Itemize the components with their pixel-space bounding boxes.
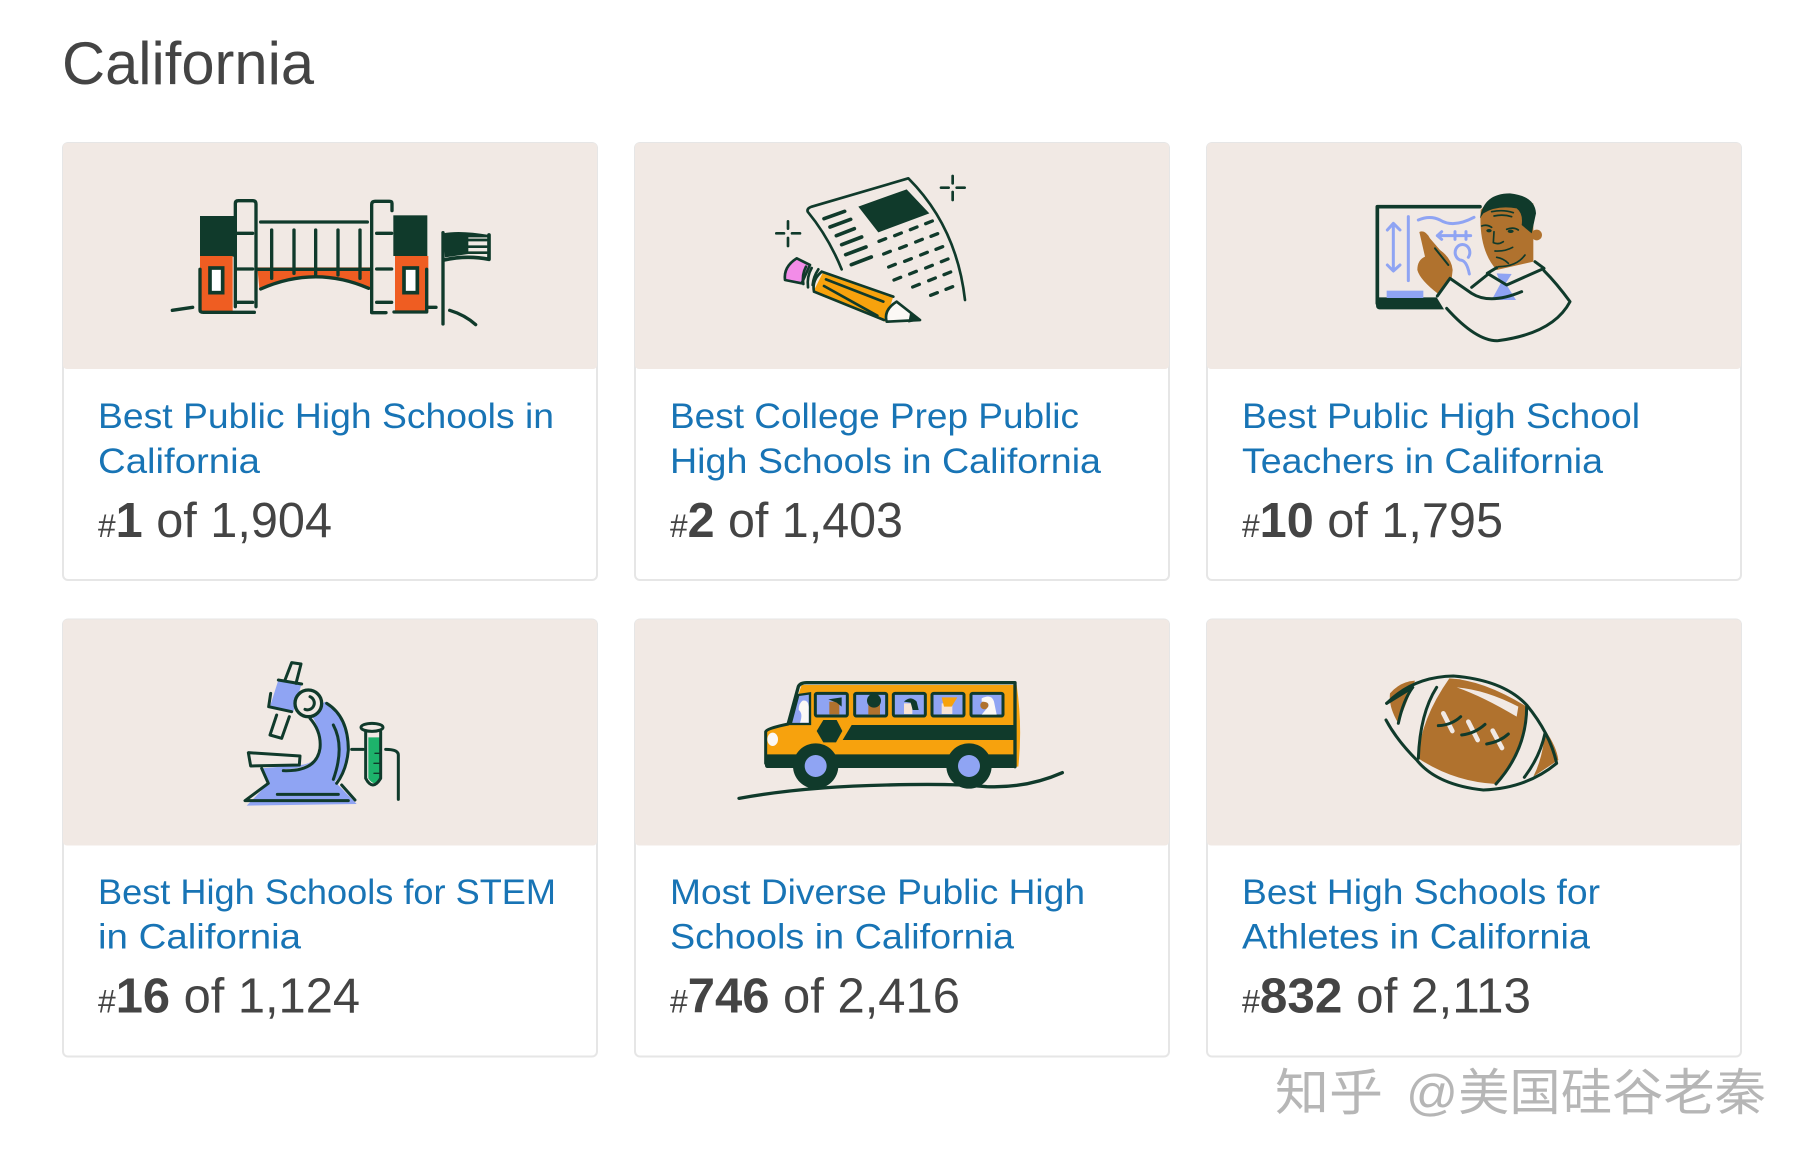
card heading: Most Diverse Public High [670, 873, 1085, 912]
panel: best teachers [1207, 143, 1741, 580]
card heading: Best College Prep Public [670, 397, 1079, 436]
watermark: 知乎 [1275, 1065, 1383, 1121]
card heading: Best Public High School [1242, 397, 1640, 436]
icon: football [1386, 676, 1558, 790]
icon: teacher at board [1376, 193, 1570, 341]
panel: most diverse [635, 620, 1169, 1056]
card heading: in California [98, 918, 302, 956]
card heading: Best Public High Schools in [98, 397, 554, 436]
title: California [62, 30, 315, 97]
rank: #2 of 1,403 [670, 494, 903, 548]
panel: best for athletes [1207, 620, 1741, 1056]
panel: best public high schools [63, 143, 597, 580]
icon: school bus [739, 683, 1062, 798]
rank: #1 of 1,904 [98, 494, 332, 548]
rank: #746 of 2,416 [670, 970, 960, 1024]
rank: #10 of 1,795 [1242, 494, 1503, 548]
card heading: Best High Schools for STEM [98, 873, 556, 912]
icon: test paper and pencil [776, 176, 965, 323]
rank: #832 of 2,113 [1242, 970, 1531, 1024]
panel: best for STEM [63, 620, 597, 1056]
card heading: California [98, 442, 261, 481]
card heading: Teachers in California [1242, 442, 1604, 481]
panel: best college prep [635, 143, 1169, 580]
card heading: High Schools in California [670, 442, 1102, 481]
card heading: Best High Schools for [1242, 873, 1600, 912]
watermark: @美国硅谷老秦 [1406, 1065, 1766, 1121]
card heading: Athletes in California [1242, 918, 1591, 956]
icon: microscope and test tube [245, 663, 398, 806]
rank: #16 of 1,124 [98, 970, 360, 1024]
icon: school gate [172, 201, 489, 325]
card heading: Schools in California [670, 918, 1015, 956]
